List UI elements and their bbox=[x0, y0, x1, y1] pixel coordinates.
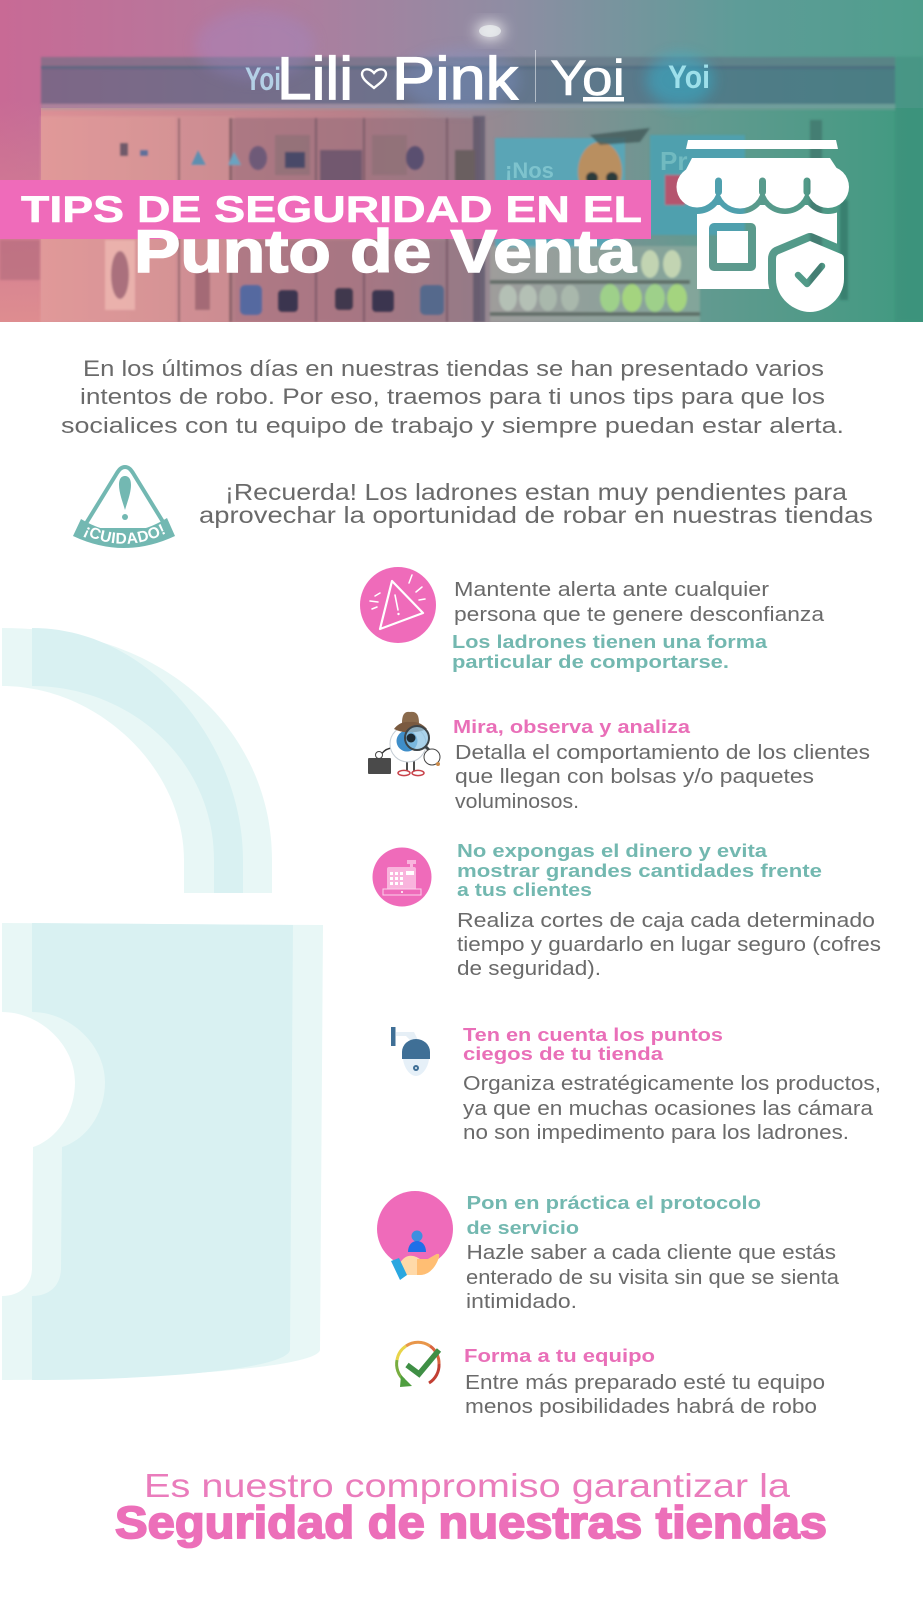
tip 3 text: de seguridad). bbox=[457, 957, 601, 980]
intro paragraph bbox=[61, 356, 844, 438]
closing message bbox=[115, 1467, 827, 1548]
reminder text bbox=[199, 479, 873, 528]
title band bbox=[0, 180, 651, 239]
icon: alert triangle bbox=[360, 567, 436, 643]
icon: green check with arc bbox=[397, 1342, 439, 1387]
tip 2 text: que llegan con bolsas y/o paquetes bbox=[455, 765, 814, 788]
tip 3: money bbox=[372, 840, 881, 980]
reminder text: aprovechar la oportunidad de robar en nuestras tiendas bbox=[199, 502, 873, 528]
closing message: Es nuestro compromiso garantizar la bbox=[144, 1467, 791, 1504]
tip 6: train team bbox=[397, 1342, 825, 1418]
tip 4: blind spots bbox=[391, 1024, 881, 1144]
tip 4 text: Ten en cuenta los puntos bbox=[463, 1024, 723, 1045]
tip 2 text: voluminosos. bbox=[455, 790, 579, 813]
tip 2 text bbox=[453, 716, 870, 813]
tip 3 text: Realiza cortes de caja cada determinado bbox=[457, 909, 875, 932]
tip 3 text: No expongas el dinero y evita bbox=[457, 840, 768, 861]
tip 5 text bbox=[466, 1192, 840, 1313]
logo: Lili Pink bbox=[281, 54, 520, 100]
tip 5 text: Pon en práctica el protocolo bbox=[466, 1192, 761, 1213]
tip 1 text: Los ladrones tienen una forma bbox=[452, 631, 768, 652]
logo: Lili Pink: Pink bbox=[392, 45, 519, 112]
tip 4 text: Organiza estratégicamente los productos, bbox=[463, 1072, 881, 1095]
background padlock watermark bbox=[2, 628, 323, 1380]
tip 5: service protocol bbox=[377, 1191, 840, 1313]
icon: cuidado warning bbox=[73, 465, 175, 548]
tip 3 text: mostrar grandes cantidades frente bbox=[457, 860, 822, 881]
icon: security camera bbox=[391, 1027, 430, 1076]
store photo background: Pr bbox=[660, 146, 687, 176]
icon: store with shield bbox=[676, 140, 849, 312]
tip 5 text: intimidado. bbox=[466, 1290, 577, 1313]
closing message: Seguridad de nuestras tiendas bbox=[115, 1497, 827, 1548]
reminder text: ¡Recuerda! Los ladrones estan muy pendientes para bbox=[225, 479, 847, 505]
tip 4 text: ciegos de tu tienda bbox=[463, 1043, 664, 1064]
tip 4 text bbox=[463, 1024, 881, 1144]
tip 1 text: persona que te genere desconfianza bbox=[454, 603, 825, 626]
icon: cuidado warning: ¡CUIDADO! bbox=[84, 524, 165, 544]
store photo background bbox=[0, 0, 923, 322]
tip 1 text: particular de comportarse. bbox=[452, 651, 729, 672]
tip 4 text: ya que en muchas ocasiones las cámara bbox=[463, 1097, 874, 1120]
icon: hand holding customer bbox=[377, 1191, 453, 1280]
header banner bbox=[0, 0, 923, 322]
logo divider bbox=[535, 50, 536, 102]
tip 6 text: menos posibilidades habrá de robo bbox=[465, 1395, 817, 1418]
tip 6 text: Forma a tu equipo bbox=[464, 1345, 655, 1366]
store photo background: Yoi bbox=[668, 59, 710, 95]
logo: Lili Pink: Lili bbox=[277, 45, 353, 112]
icon: eye detective bbox=[368, 712, 440, 776]
logo: Yoi: Yoi bbox=[550, 50, 625, 106]
tip 2: observe bbox=[368, 712, 870, 813]
intro paragraph: socialices con tu equipo de trabajo y siempre puedan estar alerta. bbox=[61, 413, 844, 438]
tip 1 text bbox=[452, 578, 825, 672]
tip 3 text bbox=[457, 840, 881, 980]
tip 5 text: Hazle saber a cada cliente que estás bbox=[466, 1241, 836, 1264]
tip 2 text: Mira, observa y analiza bbox=[453, 716, 691, 737]
intro paragraph: intentos de robo. Por eso, traemos para ti unos tips para que los bbox=[80, 384, 825, 409]
padlock dark layer bbox=[32, 628, 293, 1380]
tip 6 text bbox=[464, 1345, 825, 1418]
tip 6 text: Entre más preparado esté tu equipo bbox=[465, 1371, 825, 1394]
tip 4 text: no son impedimento para los ladrones. bbox=[463, 1121, 849, 1144]
store photo background: ¡Nos bbox=[505, 158, 554, 183]
tip 5 text: enterado de su visita sin que se sienta bbox=[466, 1266, 840, 1289]
title line 2: Punto de Venta bbox=[134, 218, 637, 285]
icon: cash register bbox=[372, 848, 432, 906]
padlock light layer bbox=[2, 628, 323, 1380]
store photo background: Yoi bbox=[245, 61, 281, 97]
tip 3 text: a tus clientes bbox=[457, 879, 592, 900]
title line 1: TIPS DE SEGURIDAD EN EL bbox=[21, 189, 642, 230]
tip 1 text: Mantente alerta ante cualquier bbox=[454, 578, 769, 601]
tip 1: alert bbox=[360, 567, 825, 672]
intro paragraph: En los últimos días en nuestras tiendas se han presentado varios bbox=[83, 356, 824, 381]
tip 2 text: Detalla el comportamiento de los clientes bbox=[455, 741, 870, 764]
tip 5 text: de servicio bbox=[466, 1217, 579, 1238]
tip 3 text: tiempo y guardarlo en lugar seguro (cofres bbox=[457, 933, 881, 956]
